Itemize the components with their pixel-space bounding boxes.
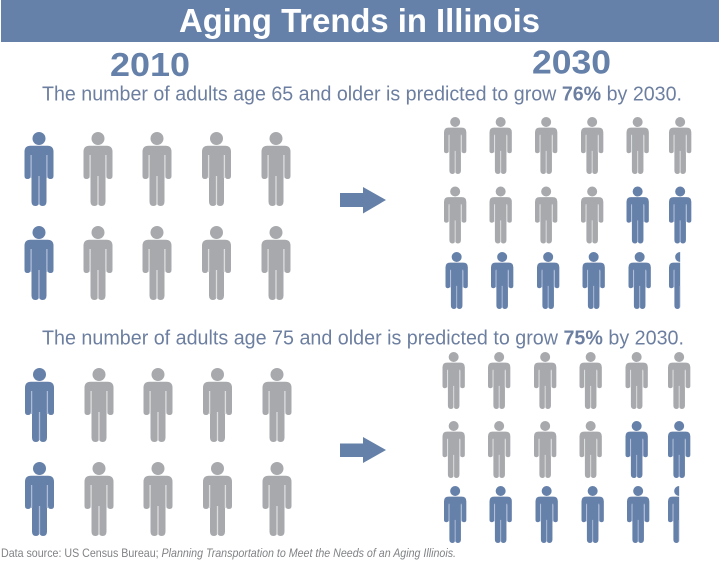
title: Aging Trends in Illinois bbox=[179, 2, 540, 39]
text: age 65 statement: The number of adults age 65 and older is predicted to grow 76% by 2030. bbox=[42, 84, 682, 106]
arrow: age 75 bbox=[340, 437, 386, 463]
data source note: Data source: US Census Bureau; Planning Transportation to Meet the Needs of an Aging Illinois. bbox=[1, 546, 456, 560]
arrow: age 65 bbox=[340, 187, 386, 214]
heading: 2030: 2030 bbox=[532, 44, 611, 80]
pictogram: age 75 in 2030 bbox=[442, 352, 690, 543]
title banner bbox=[1, 0, 719, 42]
text: age 75 statement: The number of adults age 75 and older is predicted to grow 75% by 2030. bbox=[42, 328, 684, 350]
pictogram: age 75 in 2010 bbox=[25, 368, 292, 536]
heading: 2010: 2010 bbox=[110, 46, 190, 83]
pictogram: age 65 in 2010 bbox=[24, 132, 290, 300]
pictogram: age 65 in 2030 bbox=[444, 117, 691, 309]
